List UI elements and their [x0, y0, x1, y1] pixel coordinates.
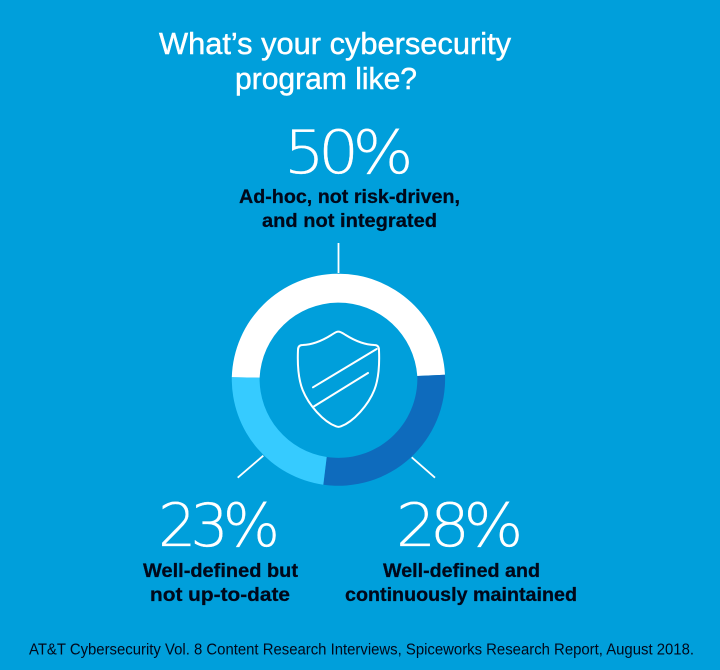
leader line: 23% — [238, 456, 263, 478]
title: program like? — [235, 62, 417, 96]
title: What’s your cybersecurity — [159, 27, 512, 61]
callout: 28%: Well-defined and — [383, 560, 540, 582]
leader line: 50% — [338, 243, 340, 273]
source note: AT&T Cybersecurity Vol. 8 Content Research Interviews, Spiceworks Research Report, August 2018. — [29, 642, 694, 658]
callout: 28% — [345, 491, 577, 606]
segment: 23% light blue — [232, 377, 327, 485]
callout: 28%: continuously maintained — [345, 584, 577, 606]
leader line: 28% — [412, 457, 435, 478]
callout: 50%: 50% — [284, 118, 409, 188]
callout: 50%: Ad-hoc, not risk-driven, — [239, 186, 460, 208]
donut chart — [232, 274, 445, 486]
segment: 28% dark blue — [323, 375, 445, 486]
segment: 50% white — [232, 274, 445, 378]
callout: 23%: 23% — [158, 491, 276, 561]
callout: 23% — [143, 491, 299, 606]
callout: 23%: not up-to-date — [150, 584, 290, 606]
title — [159, 27, 512, 96]
callout: 23%: Well-defined but — [143, 560, 299, 582]
icon: shield — [298, 332, 379, 427]
callout: 50%: and not integrated — [262, 210, 437, 232]
callout: 50% — [239, 118, 460, 232]
callout: 28%: 28% — [396, 491, 519, 561]
